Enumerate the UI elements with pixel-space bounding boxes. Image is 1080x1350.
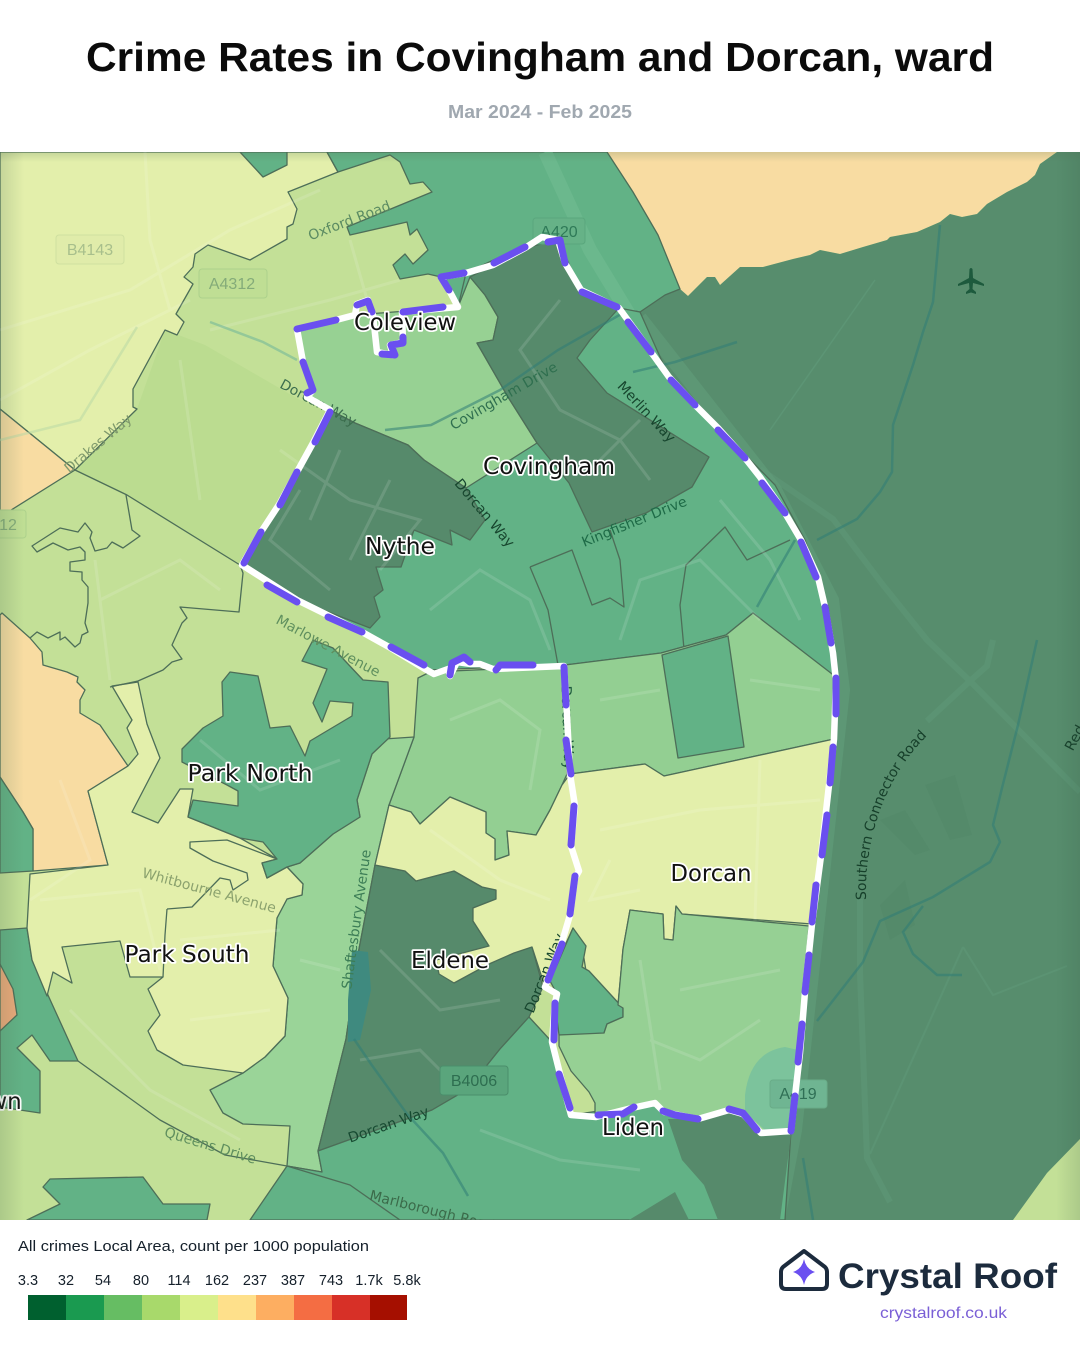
area: Coleview light green — [297, 277, 537, 488]
area: east Dorcan light green — [565, 613, 836, 776]
streams — [0, 225, 1037, 1220]
area: small dark south patch — [629, 1192, 689, 1220]
area: peach north-west wedge — [0, 409, 75, 517]
ward and area labels: Park North — [188, 761, 312, 787]
legend title: All crimes Local Area, count per 1000 population — [18, 1239, 369, 1255]
road names: Shaftesbury Avenue — [339, 849, 375, 990]
area: small top green patch — [240, 152, 287, 177]
area: Shaftesbury Avenue strip — [210, 737, 414, 1172]
legend scale values: 32 — [58, 1273, 74, 1289]
map edge shading — [0, 152, 1080, 1220]
legend scale values: 237 — [243, 1273, 267, 1289]
area: peach west zone — [0, 613, 128, 871]
area: teal pond — [348, 950, 371, 1042]
area: orange patch — [0, 964, 17, 1031]
ward and area labels: Coleview — [354, 310, 456, 336]
road names: Oxford Road — [306, 198, 393, 244]
road names: Covingham Drive — [448, 359, 560, 434]
boundary purple dashes — [244, 240, 836, 1131]
road names: Merlin Way — [614, 379, 678, 446]
logo: Crystal Roof — [781, 1251, 1057, 1322]
road shields: A419 — [779, 1086, 817, 1103]
area: inner Covingham outlines — [530, 527, 790, 665]
ward and area labels: Dorcan — [670, 861, 752, 887]
area: lake park — [745, 1047, 798, 1130]
title: Crime Rates in Covingham and Dorcan, ward — [86, 34, 994, 80]
legend colour swatches — [28, 1295, 407, 1320]
area: Nythe dark zone — [242, 410, 485, 628]
area: Park North green zone — [182, 640, 390, 878]
area: south-west mid green zone — [0, 928, 78, 1113]
area: thin zone boundaries — [30, 470, 400, 1220]
legend scale values: 54 — [95, 1273, 111, 1289]
legend scale values: 743 — [319, 1273, 343, 1289]
area: Liden light green — [559, 906, 809, 1133]
area: east dark zone — [640, 152, 1080, 1220]
road names: Whitbourne Avenue — [140, 866, 278, 917]
area: faint farm patches — [880, 775, 972, 940]
area: south Liden green — [250, 1017, 791, 1220]
area: Dorcan Way green patch — [550, 928, 623, 1035]
area: Dorcan and Eldene yellow zone — [375, 739, 834, 1005]
website url: crystalroof.co.uk — [880, 1305, 1008, 1322]
ward and area labels: Liden — [602, 1115, 664, 1141]
icon: airport plane — [958, 268, 984, 294]
road names — [64, 200, 1080, 1272]
road names: Southern Connector Road — [856, 729, 926, 900]
road shields: B4006 — [451, 1073, 497, 1090]
legend scale values: 387 — [281, 1273, 305, 1289]
area: Eldene dark zone — [318, 865, 543, 1151]
icon: house with star — [781, 1251, 827, 1289]
road names: Dorcan Way — [346, 1104, 431, 1146]
logo wordmark: Crystal Roof — [838, 1257, 1057, 1296]
area: south-west green patch — [27, 1177, 210, 1220]
legend scale values: 5.8k — [393, 1273, 421, 1289]
road names: Drakes Way — [62, 411, 135, 477]
legend scale values: 114 — [167, 1273, 191, 1289]
road names: Queens Drive — [162, 1125, 258, 1168]
ward and area labels: Park South — [124, 942, 250, 968]
legend scale values: 162 — [205, 1273, 229, 1289]
subtitle: date range: Mar 2024 - Feb 2025 — [448, 102, 632, 122]
road names: Marlowe Avenue — [273, 612, 383, 681]
area: street network — [0, 152, 820, 1170]
ward boundary: Covingham and Dorcan — [242, 237, 836, 1133]
road band: A420 — [545, 152, 630, 316]
road shields: B4143 — [67, 242, 113, 259]
ward and area labels: Eldene — [411, 948, 489, 974]
ward and area labels — [0, 310, 752, 1141]
area: north central green zone — [327, 152, 680, 312]
area: Covingham and Nythe south green zone — [335, 244, 832, 673]
road names: Dorcan Way — [558, 685, 576, 770]
area: darker lime west of Nythe — [75, 330, 330, 565]
road shields: A4312 — [209, 276, 255, 293]
area: light green north of Eldene — [389, 666, 567, 860]
legend scale values: 1.7k — [355, 1273, 383, 1289]
road names: Marlborough Road — [368, 1188, 496, 1234]
road shields: A420 — [540, 224, 578, 241]
area: Covingham dark zone — [470, 240, 709, 532]
legend scale values: 3.3 — [18, 1273, 38, 1289]
road names: Dorcan Way — [522, 931, 568, 1016]
area: west mid green patch — [0, 777, 33, 873]
area: north-east peach zone — [607, 152, 1057, 296]
area: mid green rectangle — [662, 636, 744, 758]
ward and area labels: Covingham — [483, 454, 615, 480]
road names: Dorcan Way — [277, 377, 359, 430]
road names: Dorcan Way — [451, 476, 517, 551]
area: Park South yellow zone — [27, 682, 303, 1073]
legend — [18, 1239, 421, 1320]
road band: east corridor — [640, 318, 843, 1220]
area: faint roads over the east zone — [760, 280, 1080, 1202]
road names: Kingfisher Drive — [580, 494, 689, 551]
legend scale values — [18, 1273, 421, 1289]
boundary white line — [242, 237, 836, 1133]
legend scale values: 80 — [133, 1273, 149, 1289]
area: pale north-west zone — [0, 152, 338, 470]
road shields — [0, 218, 827, 1108]
ward and area labels: Nythe — [365, 534, 435, 560]
area: Liden dark zone — [668, 1110, 791, 1220]
